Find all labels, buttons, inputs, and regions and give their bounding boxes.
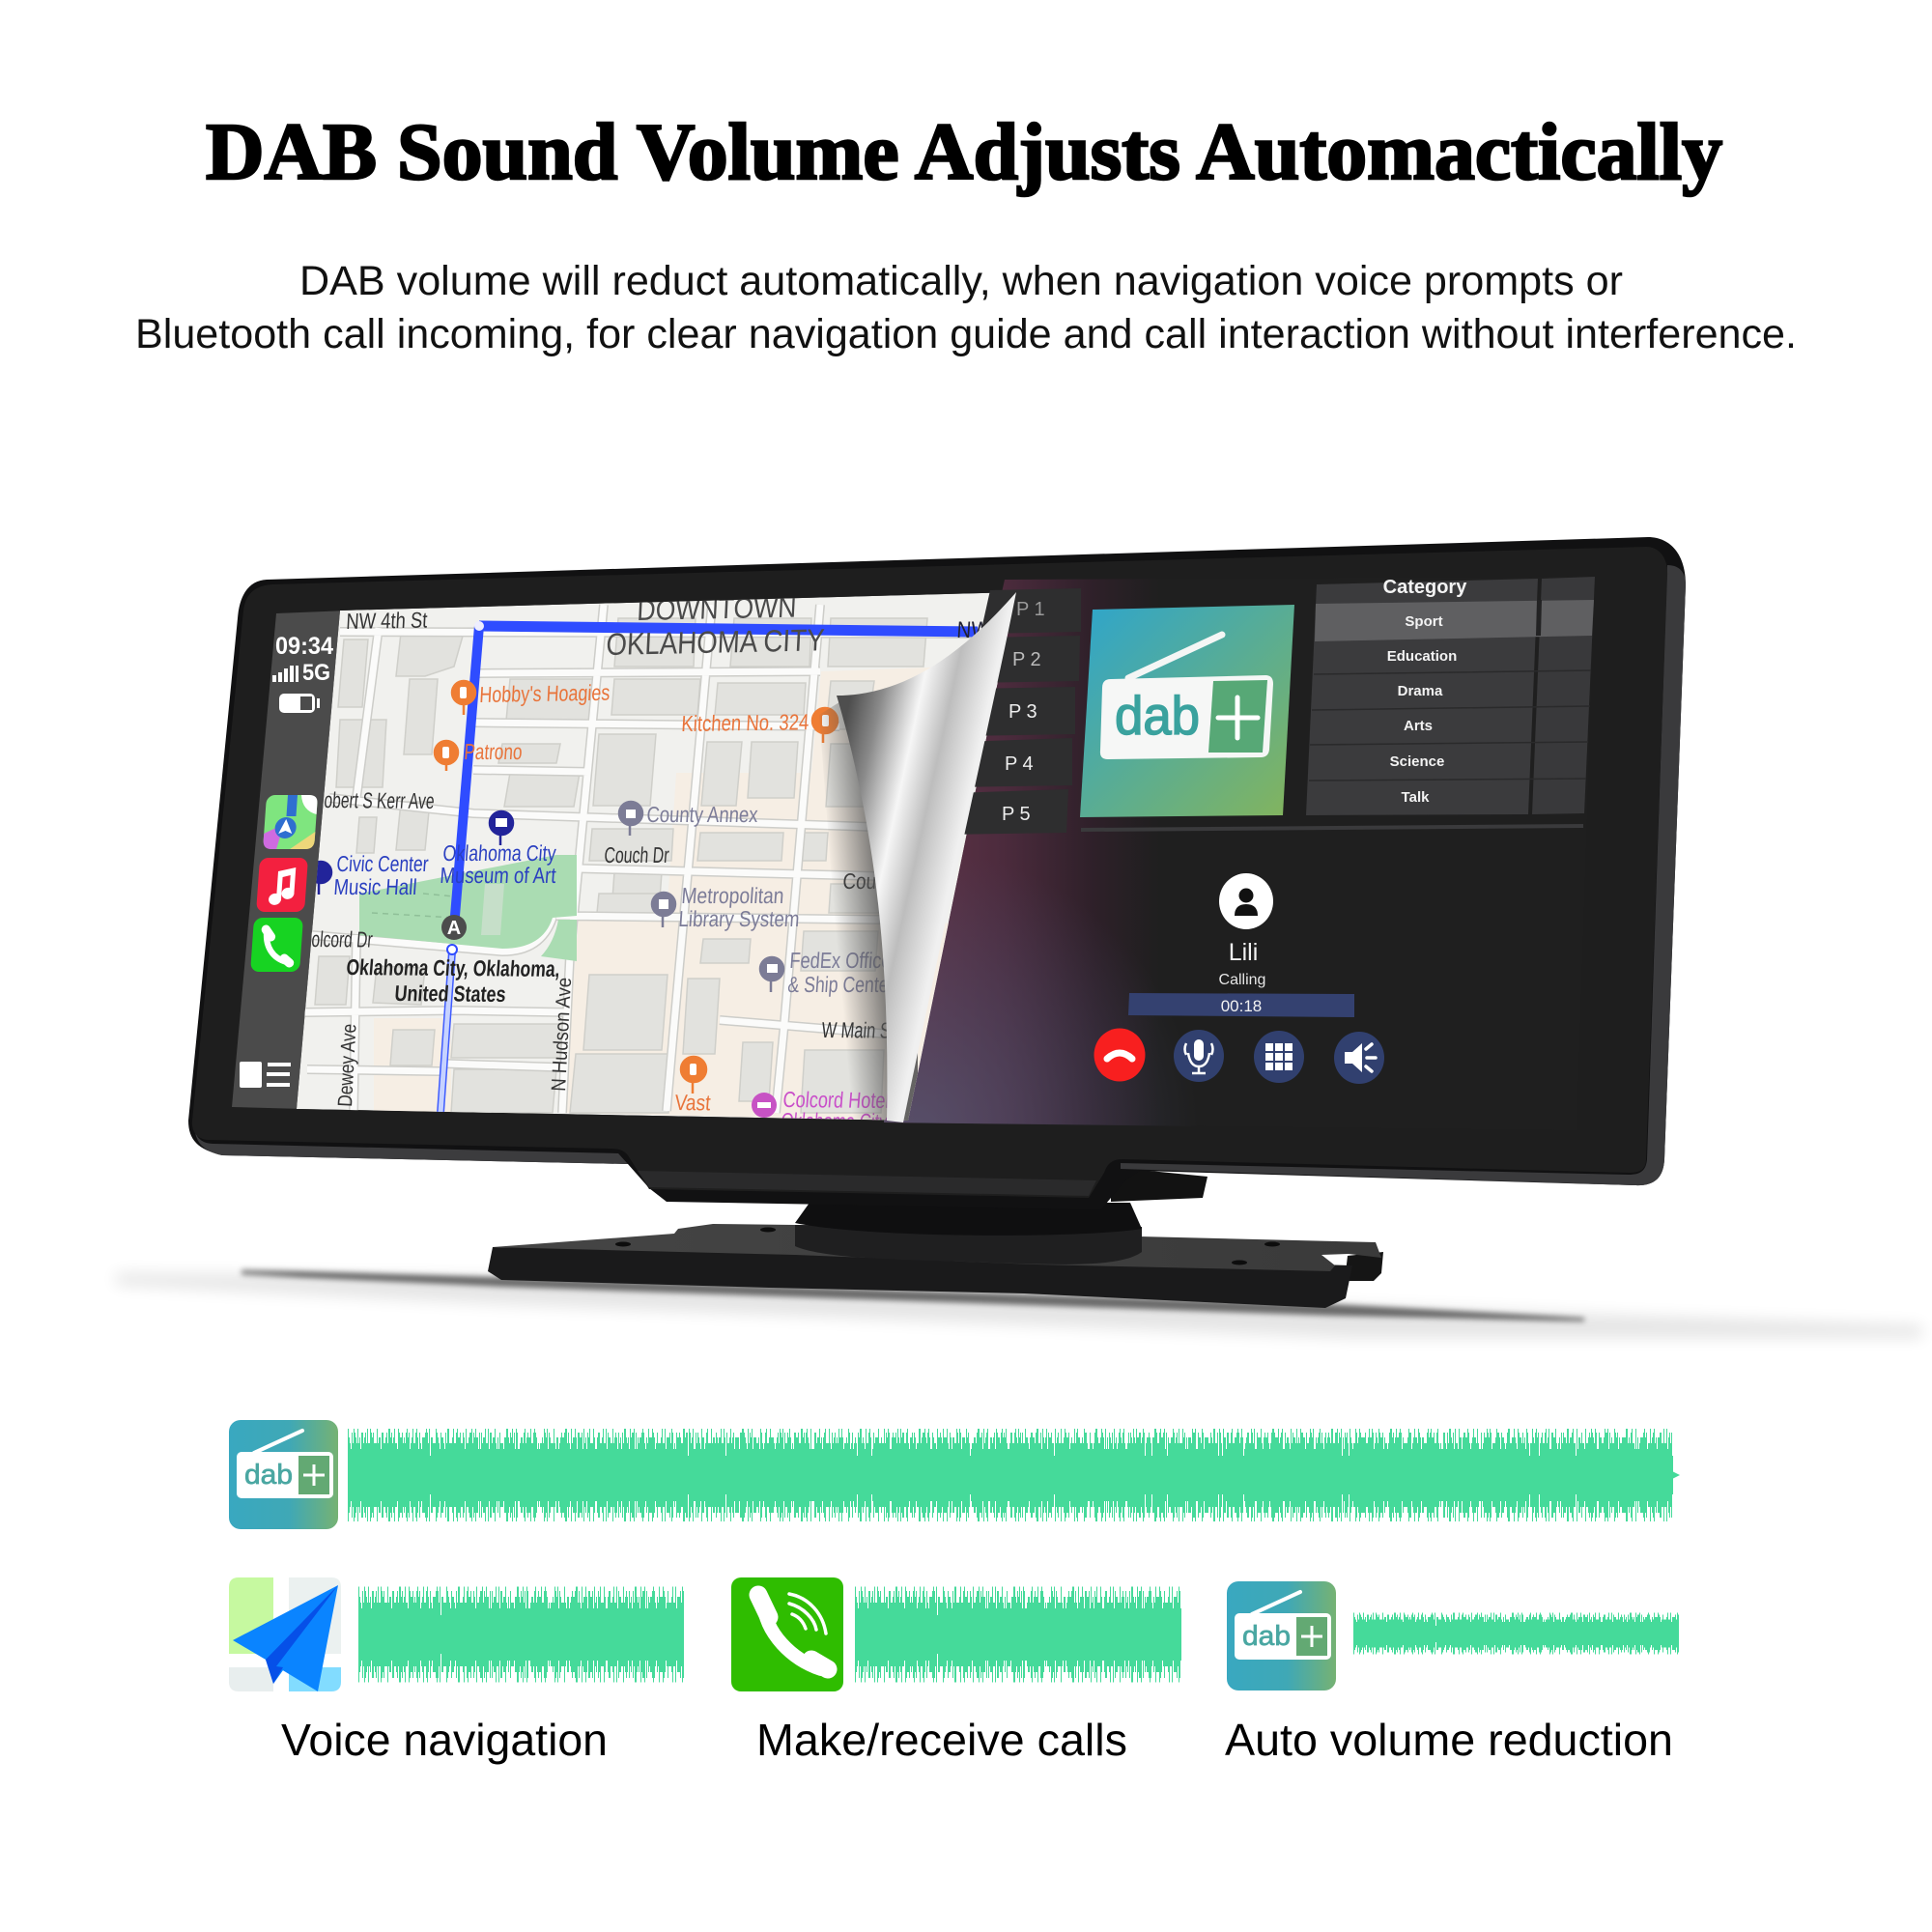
contact avatar: [1219, 873, 1273, 929]
map labels: OKLAHOMA CITY: [606, 622, 825, 662]
battery: [279, 694, 320, 713]
map: [297, 592, 1016, 1134]
category labels: Drama: [1398, 683, 1443, 699]
mount base plate front: [488, 1247, 1352, 1308]
icon: calls app: [731, 1577, 843, 1691]
selected row: [1315, 600, 1594, 641]
map pins: [310, 681, 838, 1118]
map labels: Music Hall: [333, 874, 417, 899]
icon: dab app reduced: dab: [1242, 1621, 1291, 1652]
icon: phone app: [250, 918, 303, 972]
map labels: Patrono: [464, 739, 523, 764]
radio plus panel: [1208, 680, 1267, 753]
map labels: obert S Kerr Ave: [324, 787, 436, 813]
park paths: [372, 894, 454, 918]
cast shadow of peel: [819, 696, 918, 1125]
preset labels: P 4: [1005, 753, 1034, 775]
map labels: [311, 592, 991, 1134]
intro paragraph: [135, 258, 1797, 357]
map labels: Couc: [842, 868, 886, 894]
title: DAB Sound Volume Adjusts Automactically: [206, 107, 1722, 197]
pivot upper neck: [795, 1203, 1142, 1236]
map labels: FedEx Office: [789, 948, 892, 973]
map labels: Colcord Hotel: [782, 1087, 891, 1113]
dab wordmark: dab: [1115, 685, 1200, 746]
right side rim: [1121, 565, 1686, 1185]
map labels: County Annex: [646, 802, 759, 827]
device body: [188, 537, 1686, 1209]
icon: layout switch: [240, 1062, 291, 1088]
icon: microphone: [1174, 1030, 1224, 1082]
icon: hang up: [1094, 1028, 1146, 1082]
nav waveform: [358, 1615, 684, 1654]
dab waveform: [348, 1456, 1680, 1494]
5G label: 5G: [302, 660, 330, 686]
category labels: Sport: [1405, 613, 1443, 630]
calls waveform: [855, 1615, 1181, 1654]
park: [359, 855, 577, 949]
map labels: NW 4th St: [346, 608, 429, 634]
outer shell: [188, 537, 1686, 1209]
map labels: Hobby's Hoagies: [479, 680, 611, 707]
call screen: [1094, 873, 1384, 1084]
stand rear bracket: [1111, 1167, 1208, 1202]
icon: dab app: [229, 1420, 338, 1529]
map labels: Oklahoma City: [781, 1108, 889, 1134]
map labels: N Hudson Ave: [548, 977, 576, 1092]
call timer bar: 00:18: [1221, 997, 1262, 1015]
map labels: Kitchen No. 324: [681, 709, 810, 736]
map labels: Oklahoma City: [442, 840, 557, 866]
icon: maps app: [263, 795, 318, 849]
signal bars: [272, 666, 298, 682]
contact name: Lili: [1229, 939, 1258, 966]
icon: dab app: dab: [244, 1460, 293, 1491]
radio antenna: [1128, 635, 1222, 678]
mount base plate top: [493, 1224, 1381, 1271]
preset labels: P 2: [1012, 649, 1041, 670]
streets: [304, 605, 978, 1113]
map labels: NW: [956, 617, 991, 643]
map beige districts: [374, 667, 966, 1121]
preset labels: [1002, 599, 1045, 825]
stand: [488, 1167, 1383, 1308]
map labels: Metropolitan: [681, 883, 784, 908]
park lower lawn: [541, 920, 577, 961]
divider: [1081, 826, 1583, 830]
category labels: Category: [1383, 577, 1467, 598]
map labels: Library System: [678, 906, 800, 931]
navigation route: [440, 621, 978, 1113]
front bezel: [192, 547, 1667, 1198]
DAB logo tile: [1080, 605, 1294, 817]
lower left rim: [195, 1132, 628, 1164]
preset labels: P 1: [1016, 599, 1045, 620]
label: auto volume reduction: Auto volume reduction: [1225, 1715, 1673, 1765]
map labels: Vast: [674, 1090, 712, 1115]
label: make/receive calls: Make/receive calls: [756, 1715, 1127, 1765]
right screen background: [884, 577, 1595, 1130]
plus sign: [1218, 697, 1258, 738]
category labels: Talk: [1402, 789, 1430, 806]
map labels: W Main St: [821, 1017, 896, 1043]
map labels: Couch Dr: [604, 842, 670, 867]
marker A: [441, 915, 467, 954]
carplay sidebar: [232, 611, 348, 1109]
base screw holes: [615, 1227, 1280, 1265]
ground shadow: [116, 1269, 1922, 1338]
icon: speaker: [1334, 1032, 1384, 1084]
preset tabs: [942, 588, 1081, 835]
call timer bar: [1128, 993, 1354, 1017]
park plaza: [481, 884, 504, 935]
preset labels: P 3: [1009, 701, 1037, 723]
icon: music app: [256, 858, 308, 912]
marker A: A: [447, 918, 461, 939]
icon: navigation app: [229, 1577, 341, 1691]
category labels: [1383, 577, 1467, 806]
call status: Calling: [1219, 972, 1265, 988]
label: voice navigation: Voice navigation: [281, 1715, 608, 1765]
preset labels: P 5: [1002, 804, 1031, 825]
map labels: DOWNTOWN: [637, 592, 797, 627]
map labels: Dewey Ave: [334, 1023, 360, 1107]
mount base plate right foot: [1345, 1252, 1383, 1281]
map labels: olcord Dr: [311, 926, 374, 952]
radio body: [1100, 675, 1273, 759]
map background: [297, 592, 1016, 1121]
category list: [1306, 577, 1595, 815]
icon: dab app reduced: [1227, 1581, 1336, 1690]
map labels: Museum of Art: [440, 863, 557, 888]
intro paragraph: DAB volume will reduct automatically, when navigation voice prompts or: [299, 258, 1623, 304]
intro paragraph: Bluetooth call incoming, for clear navigation guide and call interaction without interference.: [135, 311, 1797, 357]
pivot lower collar: [795, 1225, 1142, 1264]
category labels: Education: [1387, 648, 1457, 665]
category labels: Science: [1390, 753, 1444, 770]
category labels: Arts: [1404, 718, 1433, 734]
icon: keypad: [1254, 1031, 1304, 1083]
reduced dab waveform: [1353, 1626, 1679, 1642]
page curl: [837, 592, 1016, 1122]
lower notch highlight: [638, 1171, 1096, 1196]
map labels: United States: [394, 980, 507, 1007]
map labels: Civic Center: [336, 851, 430, 876]
map labels: Oklahoma City, Oklahoma,: [346, 954, 561, 981]
city blocks: [315, 618, 927, 1113]
map labels: & Ship Center: [787, 972, 895, 997]
clock: 09:34: [275, 633, 333, 660]
